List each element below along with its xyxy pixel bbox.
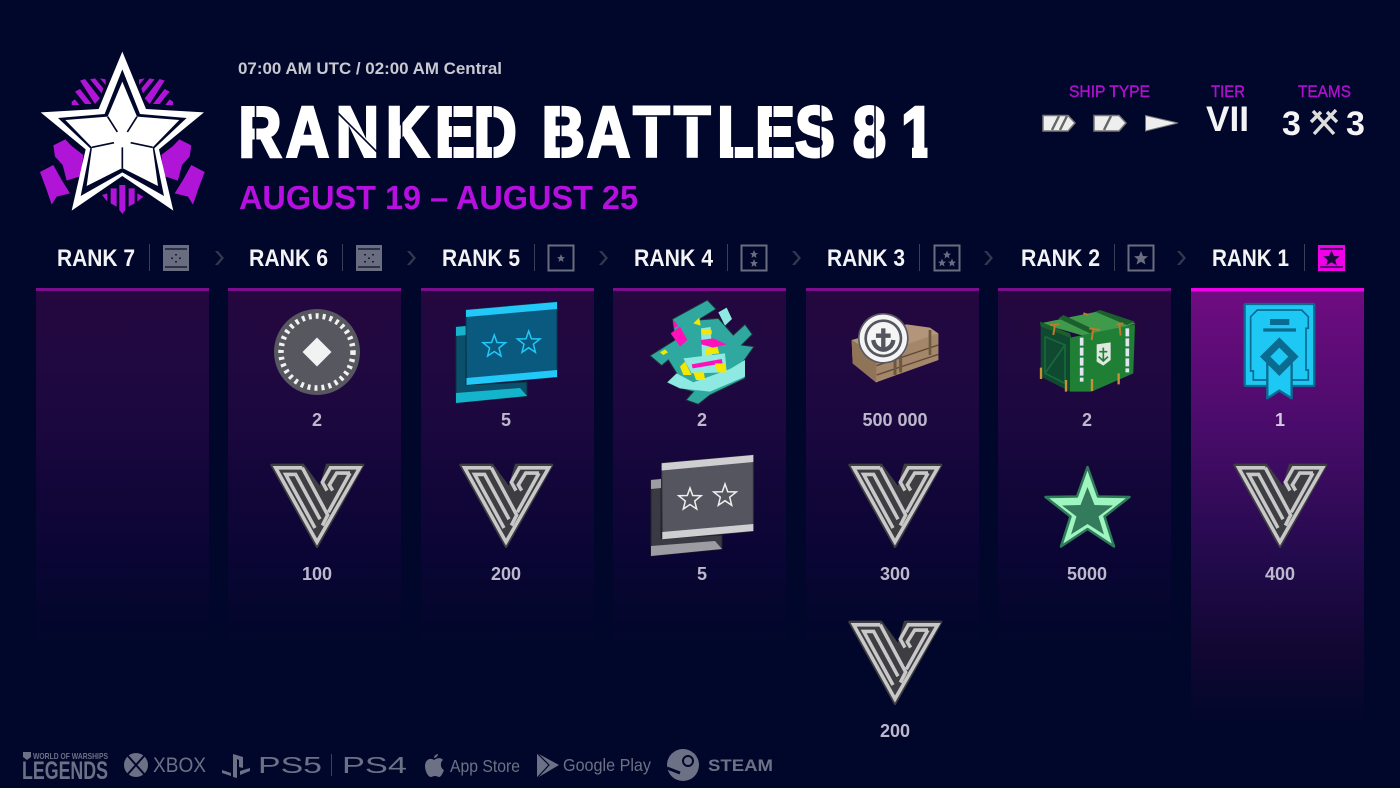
tier label: TIER <box>1211 82 1245 101</box>
rank 2 header: RANK 2 <box>1021 245 1100 272</box>
rank 7 header: RANK 7 <box>57 245 135 272</box>
rank 5 badge <box>548 246 574 270</box>
logo: world of warships legends: LEGENDS <box>22 757 108 785</box>
arrow <box>599 251 608 265</box>
title: RANKED BATTLES 81 <box>238 93 934 172</box>
rank 3 column <box>806 288 979 645</box>
logo: playstation 5 <box>222 752 322 778</box>
reward icon: green star <box>1046 467 1130 546</box>
reward value: 400 <box>1265 564 1295 584</box>
logo: playstation 5: PS5 <box>258 752 322 778</box>
tier value: VII <box>1206 100 1249 139</box>
rank 4 header: RANK 4 <box>634 245 714 272</box>
teams left count: 3 <box>1282 105 1301 143</box>
logo: steam <box>667 749 773 781</box>
rank 6 column <box>228 288 401 645</box>
panel: rank 3 <box>806 244 979 741</box>
reward value: 500 000 <box>862 410 928 430</box>
reward icon: signal medal <box>274 309 360 395</box>
date range: AUGUST 19 – AUGUST 25 <box>239 179 638 216</box>
logo: google play: Google Play <box>563 755 651 775</box>
panel: rank 2 <box>998 244 1171 645</box>
reward icon: pinata <box>650 300 754 404</box>
reward icon: green crate <box>1040 310 1136 392</box>
rank 7 column <box>36 288 209 645</box>
rank 7 badge <box>163 245 189 271</box>
logo: world of warships legends <box>22 751 108 785</box>
reward value: 2 <box>697 410 707 430</box>
rank 5 column <box>421 288 594 645</box>
reward icon: v points <box>850 622 941 704</box>
arrow <box>984 251 993 265</box>
ship type label: SHIP TYPE <box>1069 82 1150 101</box>
logo: xbox <box>124 753 206 777</box>
icon: crossed swords <box>1311 110 1337 134</box>
panel: rank 4 <box>613 244 786 645</box>
reward value: 200 <box>491 564 521 584</box>
panel: rank 6 <box>228 244 401 645</box>
reward icon: v points <box>1235 465 1326 547</box>
logo: steam: STEAM <box>708 756 773 775</box>
rank 5 header: RANK 5 <box>442 245 520 272</box>
panel: rank 5 <box>421 244 594 645</box>
panel: rank 7 <box>36 244 209 645</box>
reward value: 100 <box>302 564 332 584</box>
teams right count: 3 <box>1346 105 1365 143</box>
reward icon: blue flags <box>456 302 557 403</box>
arrow <box>407 251 416 265</box>
reward value: 2 <box>312 410 322 430</box>
reward value: 5 <box>697 564 707 584</box>
rank 6 header: RANK 6 <box>249 245 328 272</box>
arrow <box>792 251 801 265</box>
rank 2 column <box>998 288 1171 645</box>
icon: battleship <box>1146 116 1178 131</box>
logo: xbox: XBOX <box>153 754 206 777</box>
rank 1 column <box>1191 288 1364 725</box>
logo: world of warships legends: WORLD OF WARSHIPS <box>33 751 108 761</box>
teams label: TEAMS <box>1298 82 1351 101</box>
rank 3 badge <box>934 246 960 270</box>
reward value: 5000 <box>1067 564 1107 584</box>
rank 6 badge <box>356 245 382 271</box>
reward icon: credits crate <box>852 313 938 382</box>
logo: app store: App Store <box>450 756 520 776</box>
rank 4 column <box>613 288 786 645</box>
reward value: 300 <box>880 564 910 584</box>
rank 1 badge <box>1318 245 1345 271</box>
logo: google play <box>537 753 651 778</box>
reward icon: grey flags <box>651 455 753 556</box>
reward value: 1 <box>1275 410 1285 430</box>
rank 2 badge <box>1128 246 1154 270</box>
panel: rank 1 <box>1191 244 1364 725</box>
rank 4 badge <box>742 246 766 270</box>
arrow <box>1177 251 1186 265</box>
reward icon: v points <box>272 465 363 547</box>
footer: platform logos <box>22 749 773 785</box>
event time: 07:00 AM UTC / 02:00 AM Central <box>238 60 502 78</box>
icon: destroyer <box>1043 116 1075 131</box>
reward value: 5 <box>501 410 511 430</box>
logo: ranked star emblem <box>40 52 205 214</box>
battle settings <box>1043 82 1365 143</box>
arrow <box>215 251 224 265</box>
reward icon: certificate <box>1245 304 1314 398</box>
logo: app store <box>425 754 520 777</box>
reward icon: v points <box>850 465 941 547</box>
rank 3 header: RANK 3 <box>827 245 905 272</box>
rank 1 header: RANK 1 <box>1212 245 1289 272</box>
logo: playstation 4: PS4 <box>342 752 407 778</box>
icon: cruiser <box>1094 116 1126 131</box>
reward value: 2 <box>1082 410 1092 430</box>
reward value: 200 <box>880 721 910 741</box>
reward icon: v points <box>461 465 552 547</box>
